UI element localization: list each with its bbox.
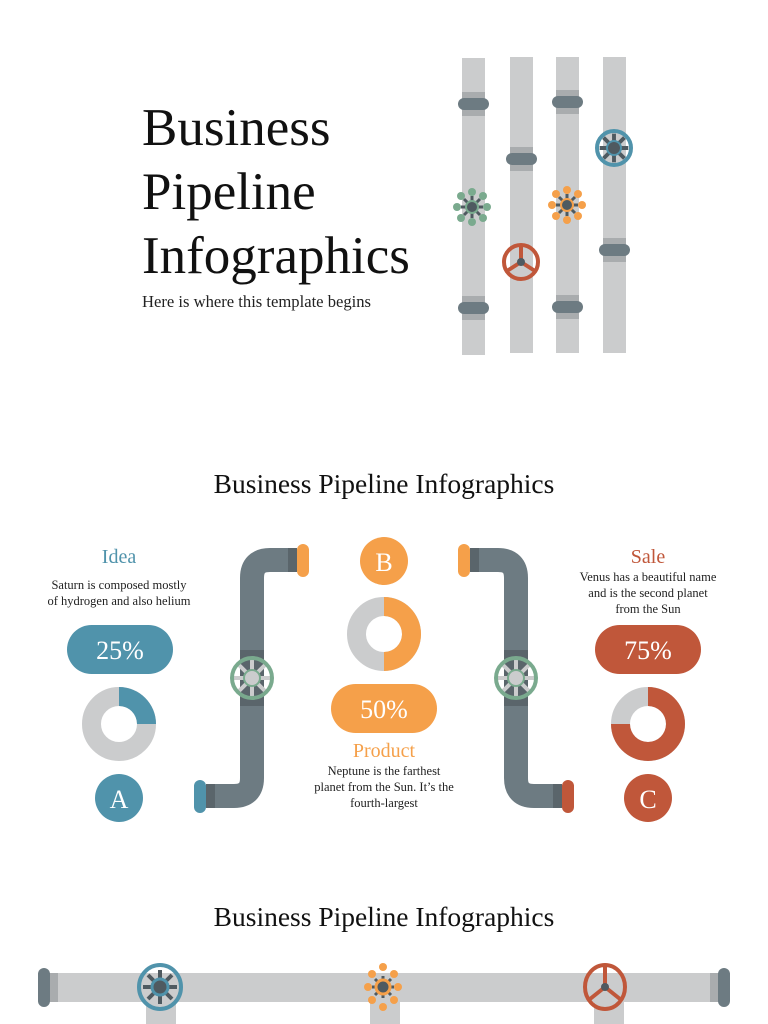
bottom horizontal pipeline xyxy=(38,963,730,1024)
icon: blue wheel valve xyxy=(597,131,631,165)
panel: sale xyxy=(580,546,717,822)
icon: red wheel valve xyxy=(585,965,625,1009)
title: Pipeline xyxy=(142,163,316,221)
panel: product: fourth-largest xyxy=(350,796,418,810)
icon: orange sprocket xyxy=(364,963,402,1011)
section heading 3: Business Pipeline Infographics xyxy=(214,901,554,932)
title: Infographics xyxy=(142,227,410,285)
panel: sale: C xyxy=(639,785,657,814)
section heading 2: Business Pipeline Infographics xyxy=(214,468,554,499)
panel: sale: Venus has a beautiful name xyxy=(580,570,717,584)
panel: product: 50% xyxy=(360,695,408,724)
icon: blue wheel valve xyxy=(139,965,181,1009)
panel: idea: Saturn is composed mostly xyxy=(51,578,187,592)
title xyxy=(142,99,410,285)
panel: product: B xyxy=(375,548,393,577)
icon: orange sprocket valve xyxy=(548,186,586,224)
hero pipes illustration xyxy=(453,57,631,355)
panel: product: planet from the Sun. It’s the xyxy=(314,780,454,794)
panel: sale: from the Sun xyxy=(615,602,681,616)
panel: idea xyxy=(47,546,191,822)
panel: sale: Sale xyxy=(631,546,665,568)
pipe: right elbow xyxy=(458,544,574,813)
title: Business xyxy=(142,99,330,157)
panel: idea: 25% xyxy=(96,636,144,665)
panel: idea: A xyxy=(110,785,129,814)
panel: product: Product xyxy=(353,740,416,762)
subtitle: Here is where this template begins xyxy=(142,292,371,311)
pipe: left elbow xyxy=(194,544,309,813)
panel: product: Neptune is the farthest xyxy=(328,764,441,778)
icon: green sprocket valve xyxy=(453,188,491,226)
panel: sale: 75% xyxy=(624,636,672,665)
panel: product xyxy=(314,537,454,810)
icon: red wheel valve xyxy=(504,245,538,279)
panel: idea: of hydrogen and also helium xyxy=(47,594,191,608)
panel: idea: Idea xyxy=(102,546,136,568)
panel: sale: and is the second planet xyxy=(588,586,708,600)
